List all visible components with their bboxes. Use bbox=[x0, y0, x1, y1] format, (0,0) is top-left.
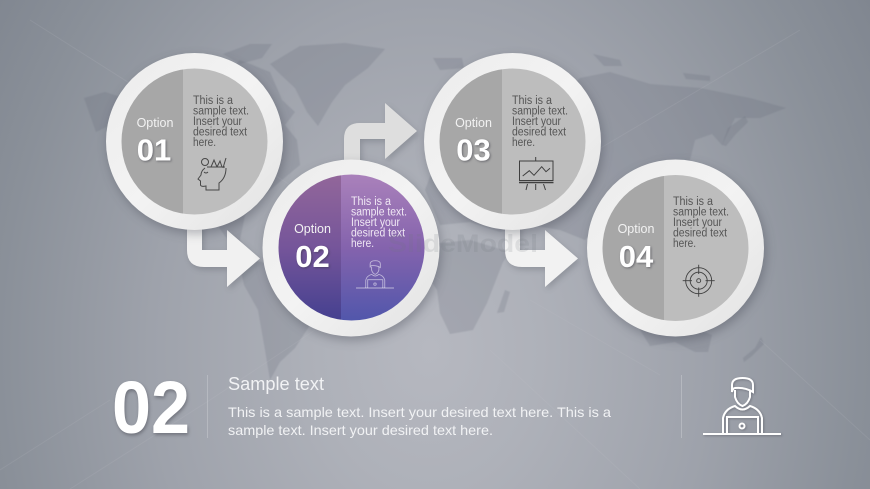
option 01 text: This is a bbox=[193, 95, 234, 107]
option 04 text bbox=[673, 196, 729, 250]
option 02 number: 02 bbox=[295, 239, 330, 274]
option 01 text: desired text bbox=[193, 126, 248, 138]
icon: person at laptop large bbox=[703, 378, 781, 434]
world map bbox=[84, 43, 786, 380]
option 03 text: desired text bbox=[512, 126, 567, 138]
option 02 label: Option bbox=[294, 222, 331, 236]
option 04 number: 04 bbox=[619, 239, 654, 274]
icon: person at laptop small bbox=[356, 261, 394, 288]
option 01 text: Insert your bbox=[193, 116, 242, 128]
option 03 label: Option bbox=[455, 116, 492, 130]
option 01 number: 01 bbox=[137, 132, 171, 168]
panel: option 03 bbox=[424, 53, 601, 230]
description text: sample text. Insert your desired text here. bbox=[228, 422, 493, 438]
heading: sample text: Sample text bbox=[228, 374, 324, 394]
map: Greenland bbox=[270, 43, 385, 126]
icon: head with ideas bbox=[198, 158, 226, 190]
map: Eurasia bbox=[425, 54, 786, 240]
option 01 text: sample text. bbox=[193, 106, 249, 118]
map: Arctic islands bbox=[223, 44, 272, 64]
option 04 text: Insert your bbox=[673, 217, 722, 229]
panel: option 01 bbox=[106, 53, 283, 230]
option 03 number: 03 bbox=[456, 132, 491, 168]
option 04 label: Option bbox=[618, 222, 654, 236]
option 01 text: here. bbox=[193, 137, 216, 149]
option 03 text: here. bbox=[512, 137, 535, 149]
description text: This is a sample text. Insert your desired text here. This is a bbox=[228, 404, 611, 420]
option 01 label: Option bbox=[137, 116, 173, 130]
map: Alaska and Canada bbox=[84, 60, 300, 262]
option 04 text: desired text bbox=[673, 228, 728, 240]
option 02 text bbox=[351, 196, 407, 250]
separator left bbox=[207, 375, 208, 438]
map: Madagascar bbox=[497, 290, 510, 313]
map: Kamchatka bbox=[722, 116, 748, 146]
map: Australia bbox=[640, 322, 712, 352]
option 02 text: Insert your bbox=[351, 217, 400, 229]
arrow: option 3 to option 4 bbox=[505, 205, 578, 287]
option 04 text: sample text. bbox=[673, 206, 729, 218]
icon: target bbox=[683, 265, 715, 297]
panel: option 04 bbox=[587, 160, 764, 336]
option 02 text: desired text bbox=[351, 228, 406, 240]
option 02 text: here. bbox=[351, 238, 374, 250]
option 03 text: This is a bbox=[512, 95, 553, 107]
big number 02: 02 bbox=[112, 366, 190, 449]
option 03 text bbox=[512, 95, 568, 149]
arrow: option 2 to option 3 bbox=[344, 103, 417, 170]
map: Africa bbox=[420, 240, 510, 334]
option 03 text: sample text. bbox=[512, 106, 568, 118]
option 03 text: Insert your bbox=[512, 116, 561, 128]
option 04 text: here. bbox=[673, 238, 696, 250]
description text bbox=[228, 404, 611, 438]
watermark: SlideModel bbox=[388, 230, 538, 258]
panel: option 02 bbox=[262, 160, 440, 336]
option 01 text bbox=[193, 95, 249, 149]
map: New Zealand bbox=[743, 337, 764, 362]
option 04 text: This is a bbox=[673, 196, 714, 208]
icon: presentation chart bbox=[519, 157, 554, 190]
option 02 text: sample text. bbox=[351, 206, 407, 218]
separator right bbox=[681, 375, 682, 438]
map: South America bbox=[238, 258, 340, 380]
option 02 text: This is a bbox=[351, 196, 392, 208]
arrow: option 1 to option 2 bbox=[187, 205, 260, 287]
